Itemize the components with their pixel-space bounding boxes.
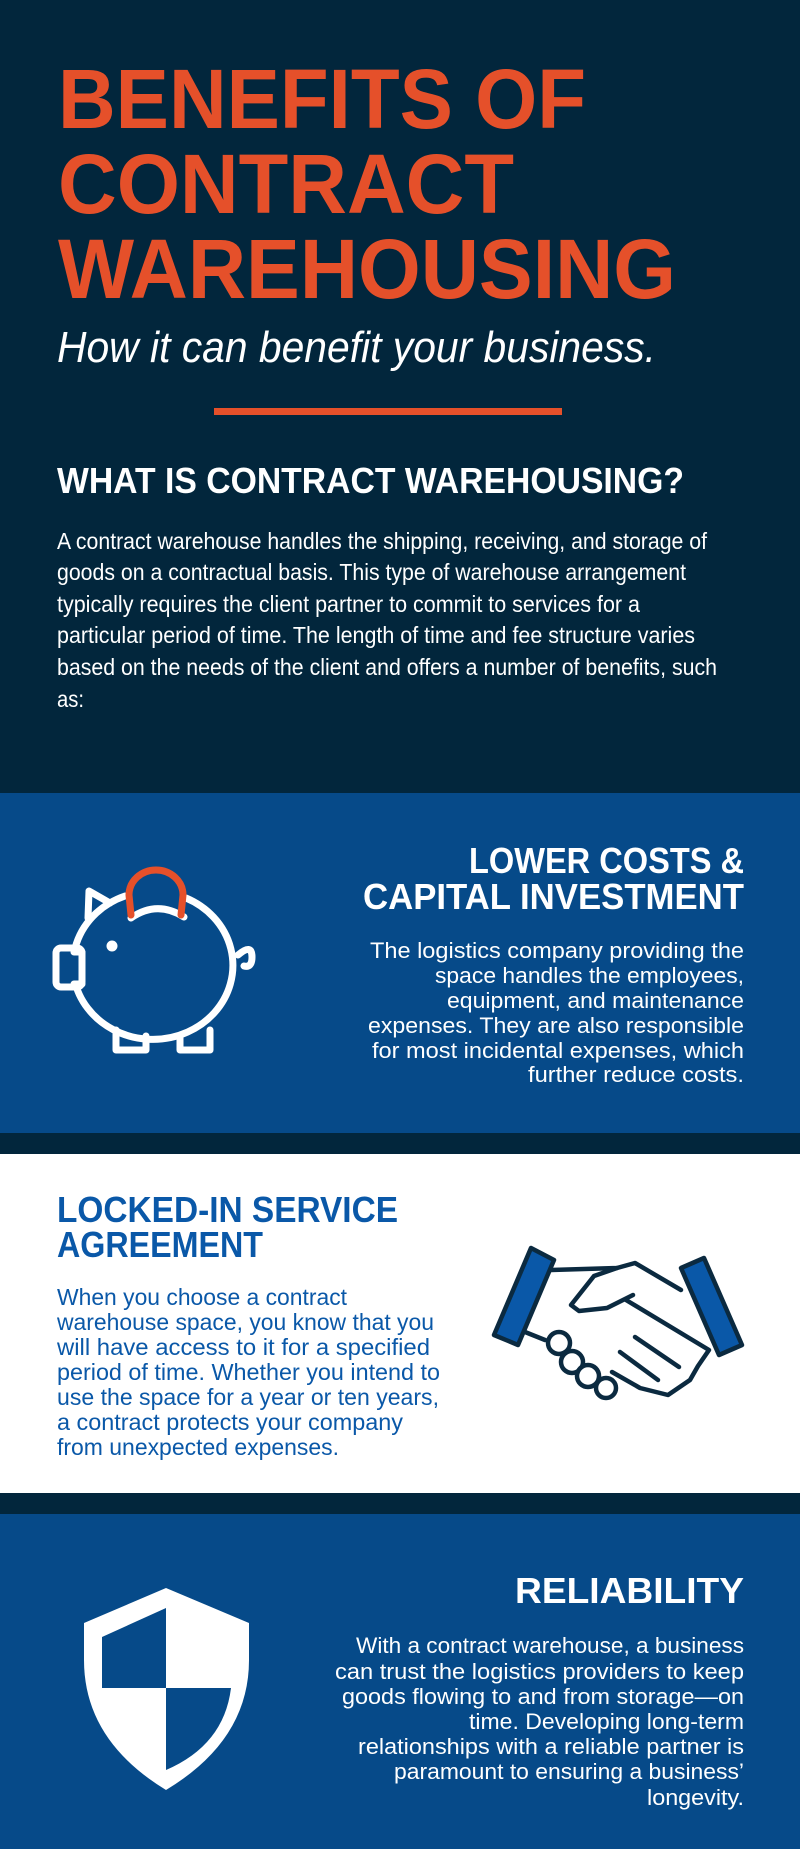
heading: what is contract warehousing: WHAT IS CONTRACT WAREHOUSING? [57, 460, 684, 501]
icon: shield [84, 1588, 249, 1790]
text block: definition: particular period of time. The length of time and fee structure varies [57, 622, 695, 648]
text block: lower costs: The logistics company providing the [370, 938, 744, 963]
heading: locked-in: AGREEMENT [57, 1224, 263, 1265]
text block: locked-in [56, 1284, 440, 1460]
text block: reliability: can trust the logistics providers to keep [335, 1659, 744, 1684]
text block: locked-in: from unexpected expenses. [57, 1434, 339, 1460]
heading: lower costs [363, 840, 744, 917]
text block: lower costs: further reduce costs. [528, 1062, 744, 1087]
text block: definition: A contract warehouse handles the shipping, receiving, and storage of [57, 528, 708, 554]
text block: locked-in: period of time. Whether you intend to [57, 1359, 440, 1385]
title: BENEFITS OF [58, 52, 586, 146]
heading: locked-in: LOCKED-IN SERVICE [57, 1189, 398, 1230]
text block: locked-in: use the space for a year or ten years, [57, 1384, 439, 1410]
heading: lower costs: CAPITAL INVESTMENT [363, 876, 744, 917]
panel: intro header [57, 52, 717, 712]
text block: definition: goods on a contractual basis. This type of warehouse arrangement [57, 559, 687, 585]
text block: reliability: time. Developing long-term [469, 1709, 744, 1734]
text block: locked-in: warehouse space, you know that you [56, 1309, 434, 1335]
text block: reliability: longevity. [647, 1785, 744, 1810]
text block: definition [57, 528, 717, 712]
text block: lower costs: equipment, and maintenance [447, 988, 744, 1013]
text block: definition: based on the needs of the client and offers a number of benefits, such [57, 654, 717, 680]
icon: handshake [494, 1248, 742, 1398]
heading: lower costs: LOWER COSTS & [469, 840, 744, 881]
heading: locked-in [57, 1189, 398, 1265]
title: WAREHOUSING [58, 222, 676, 316]
text block: reliability: relationships with a reliable partner is [358, 1734, 744, 1759]
text block: lower costs [368, 938, 744, 1087]
panel: reliability [0, 1514, 800, 1849]
text block: definition: as: [57, 686, 84, 712]
text block: reliability [335, 1633, 744, 1810]
text block: locked-in: will have access to it for a specified [56, 1334, 430, 1360]
text block: lower costs: space handles the employees, [435, 963, 744, 988]
text block: lower costs: for most incidental expenses, which [372, 1038, 744, 1063]
subtitle: How it can benefit your business. [57, 323, 656, 372]
icon: piggy bank [56, 870, 252, 1050]
title [58, 52, 676, 316]
text block: locked-in: a contract protects your company [57, 1409, 403, 1435]
divider line [214, 408, 562, 415]
text block: lower costs: expenses. They are also responsible [368, 1013, 744, 1038]
text block: definition: typically requires the client partner to commit to services for a [57, 591, 640, 617]
heading: reliability: RELIABILITY [515, 1570, 744, 1611]
title: CONTRACT [58, 137, 514, 231]
text block: reliability: paramount to ensuring a business’ [394, 1759, 744, 1784]
panel: locked-in service agreement [0, 1154, 800, 1493]
text block: reliability: goods flowing to and from storage—on [342, 1684, 744, 1709]
text block: locked-in: When you choose a contract [57, 1284, 348, 1310]
text block: reliability: With a contract warehouse, a business [356, 1633, 744, 1658]
panel: lower costs [0, 793, 800, 1133]
